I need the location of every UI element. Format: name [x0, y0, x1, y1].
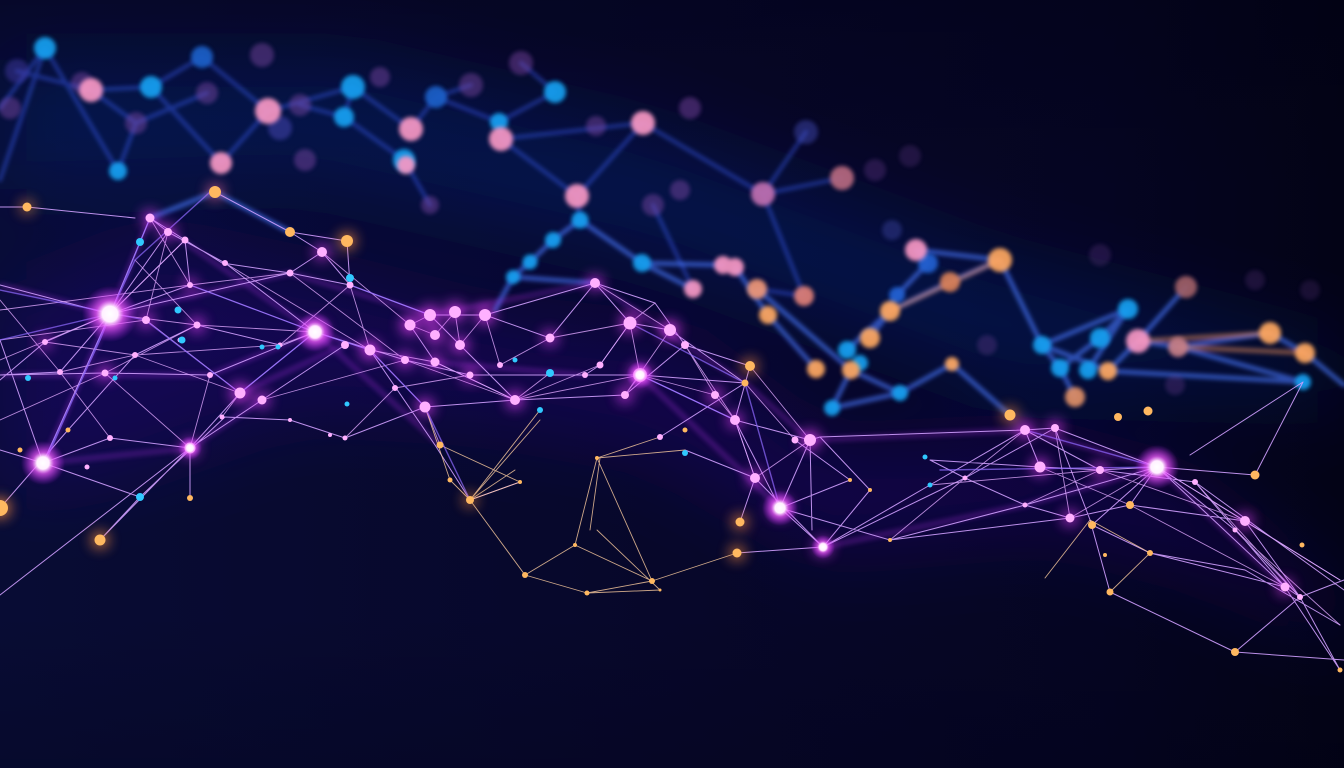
upper network: orange nodes — [759, 248, 1315, 407]
background haze — [0, 60, 1344, 640]
lower network: link glow — [0, 218, 1285, 587]
lower network: cyan nodes — [25, 238, 932, 501]
lower network: magenta nodes — [42, 214, 1303, 600]
upper network: blue nodes — [34, 37, 1311, 416]
upper network: dim out-of-focus nodes — [0, 43, 1320, 395]
bright hub nodes — [21, 286, 1179, 559]
upper network: pink nodes — [79, 78, 1197, 357]
lower network: links — [0, 192, 1344, 670]
lower network: orange nodes — [0, 186, 1342, 672]
upper network: blurred links — [0, 48, 1344, 415]
lower network: node glow — [0, 185, 1292, 594]
